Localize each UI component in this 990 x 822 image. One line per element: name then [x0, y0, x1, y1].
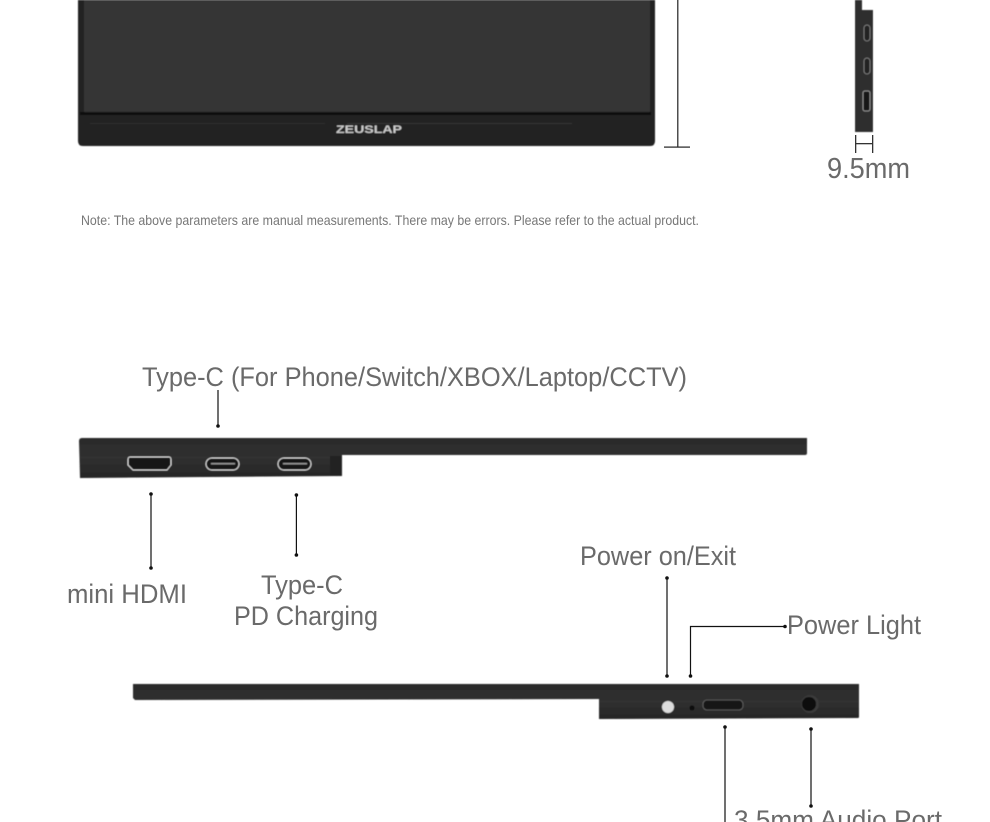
leader: Power on: [665, 576, 669, 678]
label: Type-C PD Charging: PD Charging: [234, 601, 378, 631]
brand logo text: ZEUSLAP: [336, 124, 402, 136]
leader: audio port: [809, 727, 813, 808]
thickness dimension marker: [855, 135, 873, 153]
leader: Type-C PD: [295, 493, 298, 557]
button: power: [662, 701, 674, 713]
port: Type-C two: [278, 458, 311, 470]
label: Power on/Exit: Power on/Exit: [580, 541, 736, 571]
monitor left-side edge view: [79, 438, 807, 478]
leader: Power light: [689, 625, 787, 678]
leader: volume port: [723, 725, 727, 822]
thickness label: 9.5mm: [827, 153, 910, 185]
label: Type-C multi-device: Type-C (For Phone/Switch/XBOX/Laptop/CCTV): [142, 362, 687, 392]
port: audio jack: [801, 695, 819, 713]
monitor side view: [855, 0, 873, 132]
port: volume rocker: [703, 700, 743, 710]
measurement note: Note: The above parameters are manual measurements. There may be errors. Please refer to the actual product.: [81, 212, 699, 228]
indicator: power light: [690, 706, 694, 710]
port: Type-C one: [206, 458, 239, 470]
label: Power Light: Power Light: [787, 610, 921, 640]
monitor right-side edge view: [133, 684, 859, 719]
label: mini HDMI: mini HDMI: [67, 579, 187, 609]
height dimension line: [664, 0, 690, 148]
leader: mini HDMI: [149, 492, 153, 570]
label: Type-C PD Charging: Type-C: [261, 570, 343, 600]
label: Type-C PD Charging: [234, 570, 378, 631]
monitor front view: [78, 0, 655, 146]
port: mini HDMI: [128, 457, 171, 470]
leader: Type-C top: [216, 390, 220, 428]
